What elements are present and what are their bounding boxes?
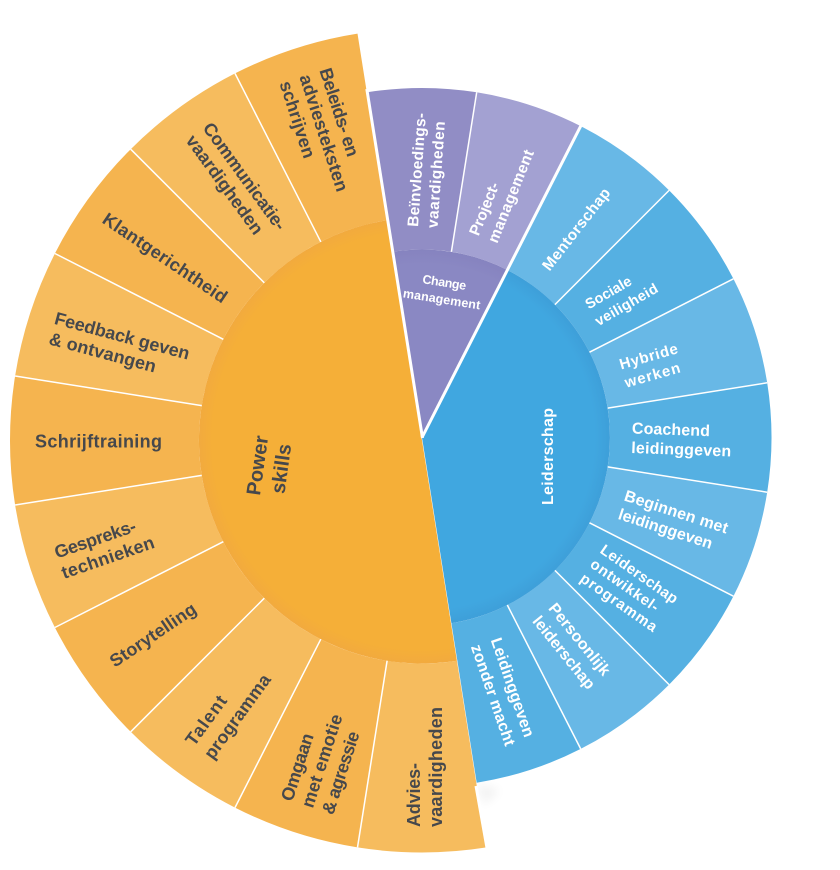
segment: Talent programma — [131, 598, 321, 808]
segment: Beleids- en adviesteksten schrijven: adviesteksten — [295, 72, 352, 194]
segment: Beginnen met leidinggeven: Beginnen met — [622, 488, 731, 538]
panel: Leiderschap — [422, 126, 772, 783]
segment: Adviesvaardigheden — [358, 661, 486, 852]
segment: Communicatievaardigheden: Communicatie- — [199, 119, 290, 234]
segment: Persoonlijk leiderschap: Persoonlijk — [545, 600, 613, 679]
center: Power skills — [199, 220, 457, 664]
segment: Beleids- en adviesteksten schrijven — [235, 34, 387, 242]
segment: Gesprekstechnieken: Gespreks- — [52, 516, 139, 562]
segment: Schrijftraining — [10, 376, 202, 505]
segment: Sociale veiligheid: veiligheid — [592, 281, 661, 330]
segment: Leiderschap ontwikkelprogramma — [555, 523, 733, 685]
segment: Hybride werken: werken — [622, 360, 682, 392]
segment: Talent programma: Talent — [181, 691, 231, 749]
center: Change management: management — [402, 286, 482, 313]
segment: Gesprekstechnieken: technieken — [59, 532, 157, 583]
segment: Adviesvaardigheden: vaardigheden — [426, 707, 446, 827]
segment: Feedback geven en ontvangen: Feedback geven — [52, 308, 192, 364]
segment: Coachend leidinggeven: Coachend — [632, 421, 710, 440]
segment: Schrijftraining: Schrijftraining — [35, 432, 162, 452]
segment: Hybride werken: Hybride — [618, 341, 680, 373]
segment: Leiderschap ontwikkelprogramma: ontwikkel- — [587, 556, 662, 616]
segment: Storytelling — [55, 542, 264, 732]
center: Power skills: skills — [268, 443, 296, 495]
segment: Omgaan met emotie en agressie: & agressie — [318, 729, 364, 817]
segment: Beïnvloedingsvaardigheden: Beïnvloedings- — [405, 112, 430, 227]
segment: Feedback geven en ontvangen — [15, 254, 223, 406]
segment: Adviesvaardigheden: Advies- — [404, 763, 424, 827]
segment: Leiderschap ontwikkelprogramma: programma — [577, 570, 661, 636]
center: Leiderschap — [422, 270, 610, 623]
segment: Leidinggeven zonder macht: Leidinggeven — [487, 636, 537, 740]
segment: Omgaan met emotie en agressie: met emotie — [297, 712, 346, 810]
segment: Omgaan met emotie en agressie — [235, 639, 387, 847]
center: Change management — [393, 249, 507, 438]
segment: Beleids- en adviesteksten schrijven: Beleids- en — [315, 65, 363, 159]
soft shadow under blue edge — [476, 783, 500, 805]
segment: Beleids- en adviesteksten schrijven: schrijven — [276, 78, 319, 161]
segment: Communicatievaardigheden — [131, 73, 321, 283]
segment: Leidinggeven zonder macht — [451, 605, 581, 783]
segment: Coachend leidinggeven: leidinggeven — [631, 440, 732, 460]
panel: Change management — [367, 88, 581, 438]
segment: Omgaan met emotie en agressie: Omgaan — [277, 731, 318, 803]
segment: Beïnvloedingsvaardigheden — [367, 88, 477, 252]
segment: Projectmanagement: management — [485, 147, 538, 246]
panel: Power skills — [10, 34, 487, 852]
segment: Talent programma: programma — [200, 669, 275, 763]
segment: Projectmanagement: Project- — [467, 180, 503, 238]
center: Change management: Change — [422, 272, 467, 293]
segment: Storytelling: Storytelling — [106, 599, 200, 671]
segment: Gesprekstechnieken — [15, 475, 223, 628]
segment: Persoonlijk leiderschap: leiderschap — [529, 613, 598, 693]
center: Power skills: Power — [243, 434, 273, 497]
segment: Klantgerichtheid — [55, 149, 264, 339]
segment: Leidinggeven zonder macht: zonder macht — [467, 643, 518, 749]
segment: Beginnen met leidinggeven — [590, 467, 767, 596]
segment: Beïnvloedingsvaardigheden: vaardigheden — [425, 121, 449, 229]
segment: Coachend leidinggeven — [608, 383, 772, 492]
segment: Mentorschap — [507, 126, 669, 305]
segment: Hybride werken — [590, 279, 767, 408]
segment: Beginnen met leidinggeven: leidinggeven — [616, 506, 714, 553]
center: Leiderschap: Leiderschap — [540, 408, 557, 505]
segment: Persoonlijk leiderschap — [507, 570, 669, 749]
segment: Projectmanagement — [451, 92, 581, 270]
segment: Mentorschap: Mentorschap — [539, 185, 614, 274]
segment: Klantgerichtheid: Klantgerichtheid — [99, 209, 231, 307]
segment: Sociale veiligheid: Sociale — [583, 274, 635, 313]
segment: Communicatievaardigheden: vaardigheden — [182, 131, 267, 238]
segment: Leiderschap ontwikkelprogramma: Leiderschap — [597, 541, 681, 608]
segment: Feedback geven en ontvangen: & ontvangen — [47, 329, 158, 376]
segment: Sociale veiligheid — [555, 190, 733, 352]
